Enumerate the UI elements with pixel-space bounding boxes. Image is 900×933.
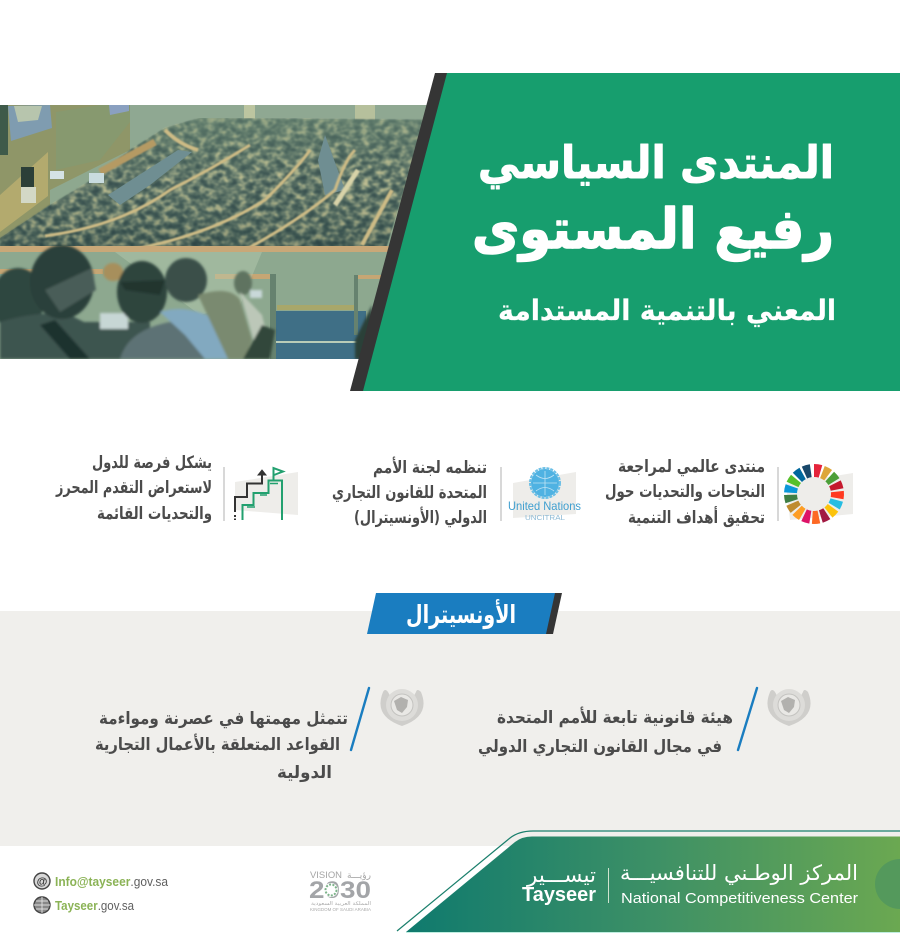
photo: conference hall	[0, 105, 430, 359]
heading: UNCITRAL: الأونسيترال	[406, 599, 516, 630]
text: centre name: المركز الوطـني للتنافسيـــة	[620, 861, 858, 885]
footer banner: National Competitiveness Center	[397, 831, 900, 933]
logo: Tayseer	[522, 863, 596, 906]
decorative circle	[875, 859, 900, 909]
text: opportunity: والتحديات القائمة	[97, 504, 212, 524]
photo: light triangle overlay	[115, 252, 262, 315]
icon: UN emblem	[767, 689, 811, 726]
icon: UN emblem	[380, 689, 424, 726]
text: opportunity: لاستعراض التقدم المحرز	[55, 478, 212, 498]
text: email: Info@tayseer.gov.sa	[55, 875, 168, 889]
fact: mission: تتمثل مهمتها في عصرنة ومواءمة	[99, 709, 348, 729]
photo: crowd	[0, 118, 425, 252]
footer: contact details	[34, 873, 168, 913]
photo: screens	[0, 105, 8, 155]
icon: United Nations logo: UNCITRAL	[525, 515, 565, 522]
text: organised by: تنظمه لجنة الأمم	[373, 457, 487, 478]
text: global forum: تحقيق أهداف التنمية	[628, 506, 765, 528]
title: رفيع المستوى	[472, 197, 834, 262]
logo: Vision 2030: المملكة العربية السعودية	[311, 901, 371, 907]
text: organised by: الدولي (الأونسيترال)	[354, 507, 487, 528]
text: organised by: المتحدة للقانون التجاري	[332, 483, 487, 503]
photo: back wall	[130, 105, 430, 140]
title	[472, 136, 836, 327]
text: centre name	[620, 861, 858, 907]
item: organised by UN commission	[332, 457, 581, 528]
text: global forum: النجاحات والتحديات حول	[605, 482, 765, 502]
logo: Vision 2030: VISION	[310, 870, 342, 881]
icon: United Nations logo	[508, 468, 581, 522]
icon: stairs and flag	[235, 468, 298, 520]
logo: Vision 2030: رؤيـــة	[347, 871, 371, 881]
fact: mission: القواعد المتعلقة بالأعمال التجارية	[95, 734, 340, 755]
logo: Vision 2030	[309, 870, 371, 912]
text: opportunity: يشكل فرصة للدول	[92, 453, 212, 473]
text: organised by	[332, 457, 487, 528]
title: المعني بالتنمية المستدامة	[498, 294, 836, 327]
text: centre name: National Competitiveness Center	[621, 890, 858, 907]
fact: mission	[95, 688, 424, 783]
fact: legal body: في مجال القانون التجاري الدولي	[478, 737, 722, 757]
photo: foreground audience	[0, 245, 372, 359]
text: opportunity	[55, 453, 212, 524]
logo: Tayseer: تيســـير	[526, 863, 596, 887]
photo: desks	[45, 130, 392, 250]
banner green shape	[363, 73, 900, 391]
icon: United Nations logo: United Nations	[508, 499, 581, 513]
item: global forum	[605, 457, 853, 528]
text: website: Tayseer.gov.sa	[55, 899, 134, 913]
fact: legal body: هيئة قانونية تابعة للأمم المتحدة	[497, 707, 733, 728]
photo: aisle	[108, 150, 192, 205]
photo: left wood wall	[0, 105, 130, 240]
title: المنتدى السياسي	[478, 136, 834, 189]
photo: crowd tint	[0, 118, 425, 252]
fact: mission: الدولية	[277, 763, 332, 783]
panel: UNCITRAL	[0, 593, 900, 846]
logo: Vision 2030: 2030	[309, 877, 371, 904]
photo: carpet	[276, 311, 366, 359]
photo: partitions	[0, 269, 103, 274]
icon: SDG wheel	[781, 461, 853, 527]
heading: UNCITRAL	[367, 593, 562, 634]
banner dark stripe	[350, 73, 449, 391]
photo: presenter and desk screens	[21, 167, 104, 203]
icon: globe	[34, 897, 50, 913]
text: global forum	[605, 457, 765, 528]
item: opportunity for countries	[55, 453, 298, 524]
photo: rail and wall	[0, 246, 395, 252]
panel: title banner	[350, 73, 900, 391]
logo: Vision 2030: KINGDOM OF SAUDI ARABIA	[310, 907, 371, 912]
text: global forum: منتدى عالمي لمراجعة	[618, 457, 765, 477]
fact: legal body	[478, 688, 811, 757]
logo: Tayseer: Tayseer	[522, 884, 596, 906]
icon: at sign: @	[37, 876, 48, 888]
